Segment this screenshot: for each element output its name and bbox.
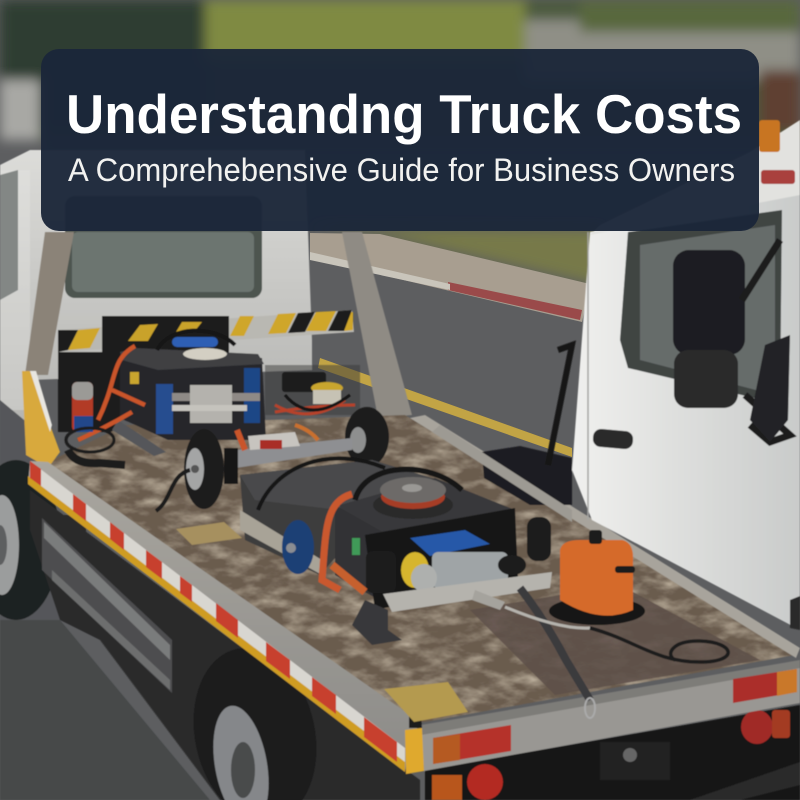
yellow corner post [405, 728, 424, 774]
door handle [592, 428, 634, 450]
title banner [41, 49, 759, 231]
hose over disc [355, 469, 462, 500]
black side handle [527, 517, 551, 561]
main winch unit [240, 458, 552, 645]
red reflectors [433, 725, 511, 764]
gas cylinder [72, 382, 93, 432]
silver cylinder [432, 552, 508, 588]
top disc [373, 491, 453, 519]
yellow deck placards [176, 522, 468, 722]
long grey housing [240, 460, 445, 575]
red curb [448, 282, 582, 320]
right deck rail [410, 415, 800, 658]
rear label plate [600, 742, 670, 780]
flatbed deck [40, 410, 800, 730]
side rail with reflective stripes [28, 461, 420, 772]
rear wheel [178, 636, 332, 800]
coiled black hose [66, 428, 114, 452]
black strap with carabiner [520, 588, 595, 718]
headache rack frame and warning stripes [25, 232, 412, 418]
side window [620, 210, 782, 404]
subtitle text: A Comprehebensive Guide for Business Owners [68, 152, 735, 188]
blue plate [410, 530, 490, 556]
near wheel [184, 429, 224, 509]
green label [352, 538, 360, 555]
yellow cable spool [282, 372, 326, 392]
tail lights [741, 710, 773, 744]
title text: Understandng Truck Costs [66, 83, 742, 145]
stand foot [352, 600, 402, 645]
top blue cylinder and plate [172, 337, 218, 347]
cab top with roof marker lights [590, 120, 800, 235]
yellow road line [318, 358, 572, 457]
right cab door [572, 190, 800, 630]
middle axle with wheels [156, 407, 389, 511]
sidewalk [310, 233, 590, 322]
black storage box [432, 345, 572, 522]
rear underside and lights [425, 705, 800, 800]
under-bed frame and toolbox [0, 490, 420, 800]
yellow front panel of bed [22, 371, 60, 468]
cab rear window [65, 196, 262, 298]
coiled cable [472, 590, 728, 662]
orange hoses [78, 346, 145, 440]
far wheel [345, 407, 389, 467]
orange pump box [549, 530, 645, 625]
dark equipment behind the deck [58, 352, 360, 432]
blue pulley [282, 520, 314, 574]
orange strap [322, 494, 352, 590]
upper winch assembly [66, 331, 266, 465]
side mirror [673, 250, 745, 355]
rear bumper [405, 660, 800, 774]
smooth dark deck strip [470, 585, 760, 695]
silver tray [383, 572, 552, 612]
cab rear wall [0, 150, 312, 425]
box top and front [340, 478, 515, 535]
left fender and front wheel [0, 400, 60, 620]
